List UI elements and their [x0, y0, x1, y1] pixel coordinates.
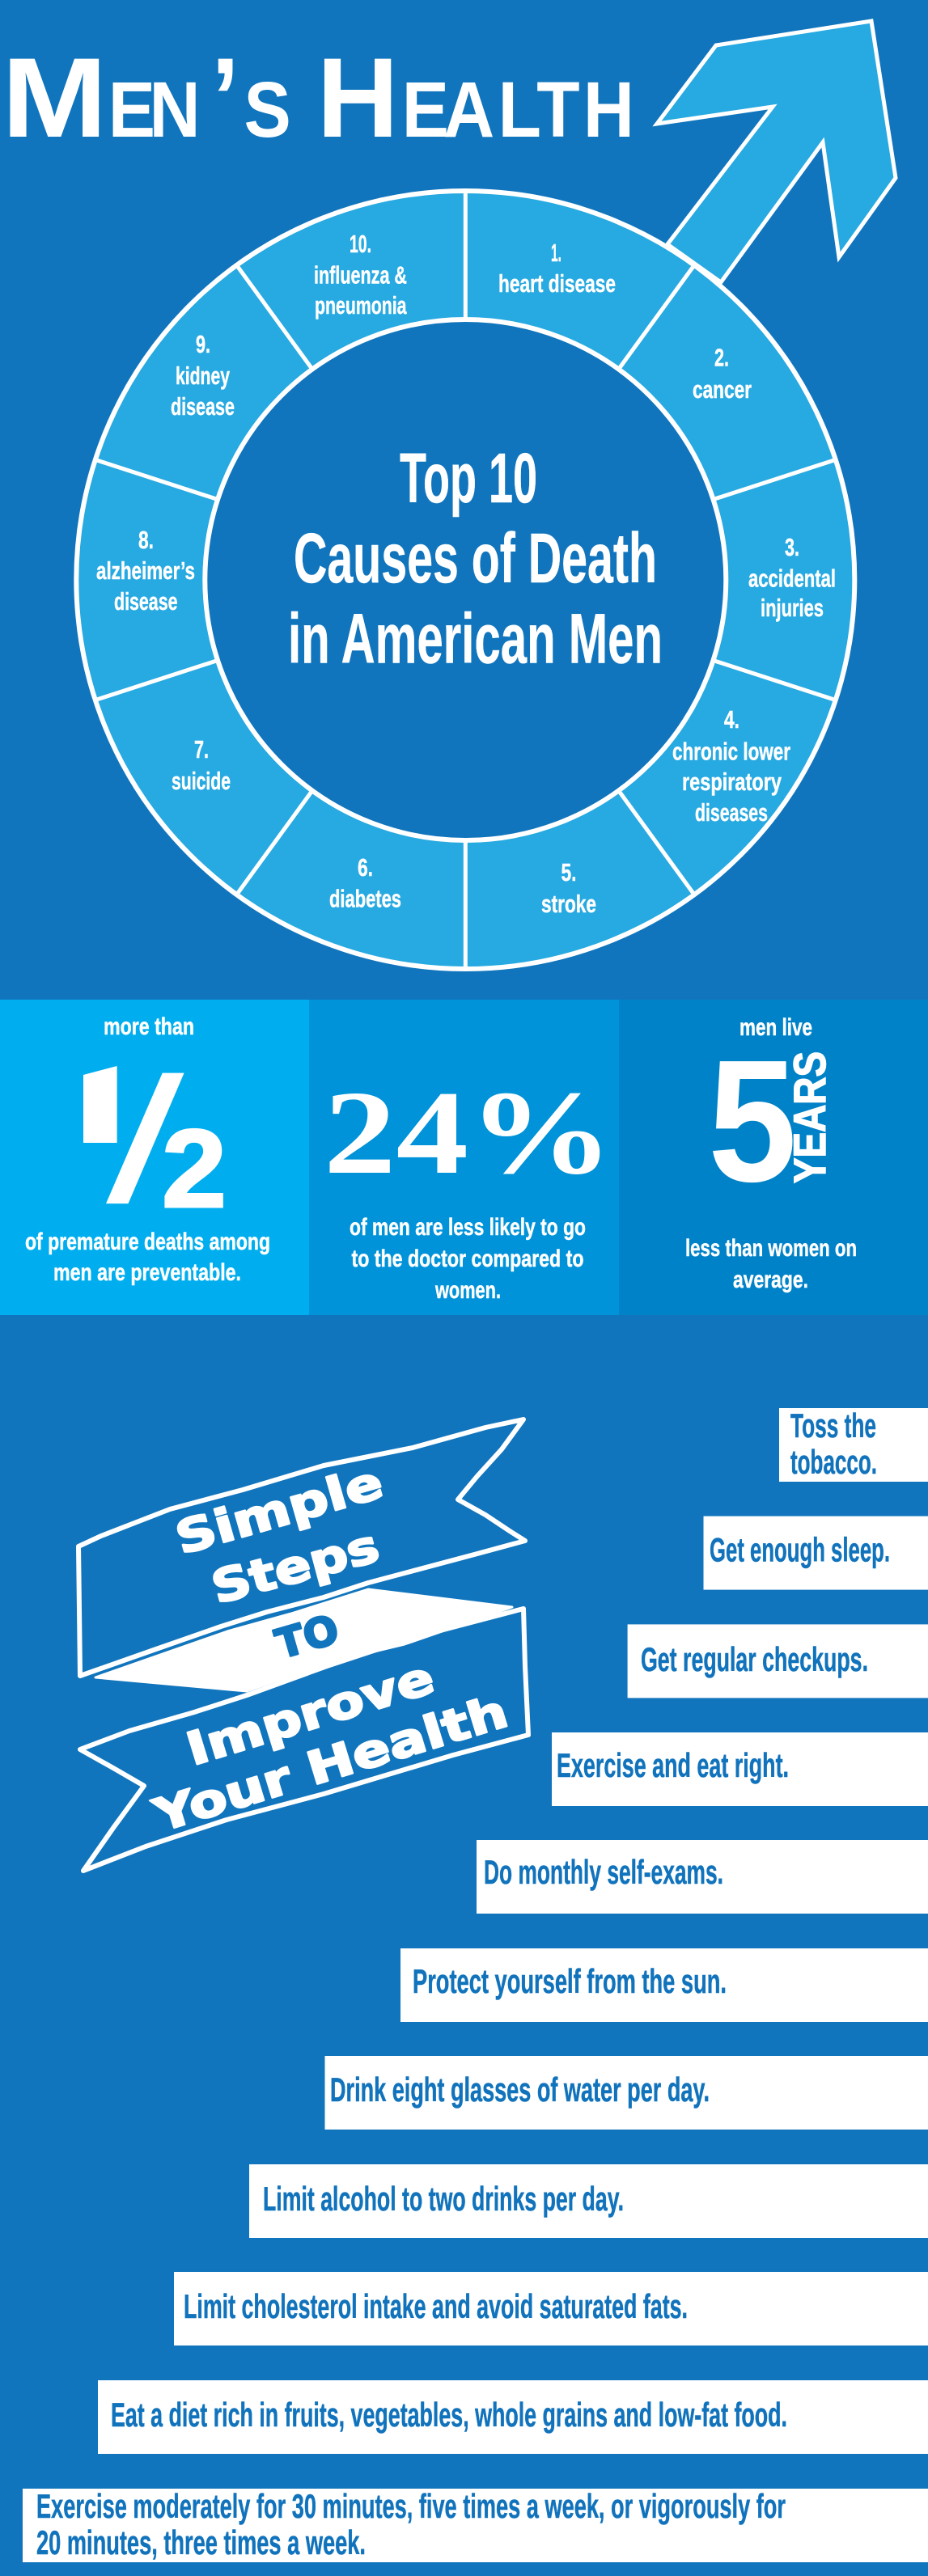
step bar 6 — [400, 1948, 928, 2022]
segment 7: suicide: suicide — [172, 767, 231, 795]
step bar 6: Protect yourself from the sun. — [413, 1962, 727, 2000]
step bar 11 — [23, 2487, 928, 2562]
big number: one half: 2 — [162, 1106, 227, 1230]
segment 8: alzheimer's disease — [96, 526, 195, 615]
label: years rotated: YEARS — [784, 1051, 835, 1183]
ring chart: top 10 causes of death — [76, 191, 854, 969]
segment 3: accidental injuries: 3. — [785, 533, 799, 561]
segment 10: influenza and pneumonia: pneumonia — [315, 291, 407, 319]
segment 9: kidney disease: 9. — [196, 330, 210, 358]
segment 7: suicide — [172, 735, 231, 795]
segment 8: alzheimer's disease: alzheimer’s — [96, 556, 195, 585]
banner text: Improve: Improve — [180, 1652, 440, 1776]
caption: less likely to go to the doctor: to the doctor compared to — [351, 1246, 584, 1272]
segment 2: cancer: cancer — [693, 375, 752, 404]
segment 9: kidney disease: disease — [171, 392, 235, 421]
panel: 24 percent — [309, 1000, 619, 1315]
step bar 7 — [325, 2056, 928, 2130]
step bar 9 — [174, 2272, 928, 2345]
big number: one half: 1 — [14, 1042, 176, 1166]
title: ’ — [211, 35, 239, 161]
panel: one half of premature deaths — [0, 1000, 309, 1315]
segment 7: suicide: 7. — [194, 735, 209, 763]
caption: less likely to go to the doctor: women. — [434, 1277, 501, 1304]
banner text: Steps: Steps — [206, 1520, 384, 1615]
segment 10: influenza and pneumonia: influenza & — [314, 261, 407, 290]
title: M — [2, 35, 108, 161]
segment 3: accidental injuries — [748, 533, 836, 622]
step bar 8: Limit alcohol to two drinks per day. — [263, 2180, 624, 2218]
segment 2: cancer: 2. — [714, 343, 729, 372]
big number: one half: / — [106, 1041, 185, 1240]
segment 8: alzheimer's disease: disease — [114, 587, 178, 615]
step bar 4: Exercise and eat right. — [557, 1746, 789, 1784]
heading: centre of ring — [288, 439, 663, 679]
segment 5: stroke: 5. — [561, 858, 576, 886]
title: S — [244, 66, 291, 154]
segment 1: heart disease: heart disease — [498, 269, 616, 298]
ribbon: bottom — [80, 1609, 528, 1871]
segment 4: chronic lower respiratory diseases — [672, 705, 790, 827]
title — [2, 34, 634, 161]
heading: centre of ring: Top 10 — [400, 439, 537, 518]
segment 1: heart disease — [498, 239, 616, 298]
panel: men live 5 years less — [619, 1000, 928, 1315]
step bar 10 — [98, 2380, 928, 2454]
step bar 1 — [779, 1406, 928, 1482]
heading: centre of ring: in American Men — [288, 600, 663, 679]
segment 5: stroke: stroke — [541, 890, 596, 918]
segment 9: kidney disease: kidney — [176, 362, 231, 390]
big number: 5: 5 — [708, 1023, 797, 1218]
step bar 3 — [628, 1624, 928, 1698]
heading: centre of ring: Causes of Death — [294, 519, 657, 598]
step bar 4 — [552, 1732, 928, 1806]
big number: one half — [83, 1066, 223, 1208]
segment 6: diabetes: 6. — [358, 853, 373, 882]
segment 4: chronic lower respiratory diseases: respiratory — [682, 768, 782, 796]
icon: male symbol arrow — [657, 21, 896, 282]
segment 4: chronic lower respiratory diseases: diseases — [695, 798, 768, 827]
segment 6: diabetes — [329, 853, 401, 912]
caption: less likely to go to the doctor: of men are less likely to go — [350, 1214, 586, 1241]
step bar 7: Drink eight glasses of water per day. — [330, 2071, 710, 2109]
banner text: To: TO — [270, 1605, 344, 1669]
segment 3: accidental injuries: injuries — [761, 594, 824, 622]
caption: less than women — [685, 1235, 857, 1293]
banner text: Your Health: Your Health — [147, 1686, 514, 1843]
caption: men live: men live — [739, 1014, 812, 1041]
banner: simple steps to improve your health — [78, 1419, 528, 1871]
segment 10: influenza and pneumonia — [314, 230, 407, 319]
ribbon: white fold — [95, 1589, 512, 1691]
caption: less than women: less than women on — [685, 1235, 857, 1262]
caption: of premature deaths: men are preventable. — [53, 1259, 241, 1286]
step bar 1: tobacco. — [790, 1443, 877, 1481]
segment 8: alzheimer's disease: 8. — [138, 526, 154, 554]
segment 3: accidental injuries: accidental — [748, 565, 836, 592]
segment 4: chronic lower respiratory diseases: 4. — [724, 705, 739, 734]
step bar 5 — [477, 1840, 928, 1914]
caption: less than women: average. — [733, 1267, 808, 1293]
step bar 8 — [249, 2164, 928, 2238]
segment 6: diabetes: diabetes — [329, 885, 401, 912]
caption: less likely to go to the doctor — [350, 1214, 586, 1304]
ribbon: top — [78, 1419, 525, 1676]
big number: 24%: 24% — [324, 1067, 613, 1199]
caption: more than: more than — [104, 1013, 194, 1040]
segment 10: influenza and pneumonia: 10. — [350, 230, 371, 258]
caption: of premature deaths — [25, 1229, 270, 1286]
segment 9: kidney disease — [171, 330, 235, 421]
title: EN — [108, 66, 201, 154]
step bar 5: Do monthly self-exams. — [484, 1853, 723, 1891]
title: H — [317, 34, 399, 161]
segment 4: chronic lower respiratory diseases: chronic lower — [672, 738, 790, 766]
step bar 11: 20 minutes, three times a week. — [36, 2523, 366, 2561]
step bar 1: Toss the — [790, 1406, 876, 1445]
segment 1: heart disease: 1. — [551, 239, 561, 267]
segment 2: cancer — [693, 343, 752, 404]
segment 5: stroke — [541, 858, 596, 918]
banner text: Simple: Simple — [170, 1456, 389, 1565]
caption: of premature deaths: of premature deaths among — [25, 1229, 270, 1255]
title: EALTH — [402, 66, 634, 154]
step bar 2 — [704, 1516, 928, 1590]
